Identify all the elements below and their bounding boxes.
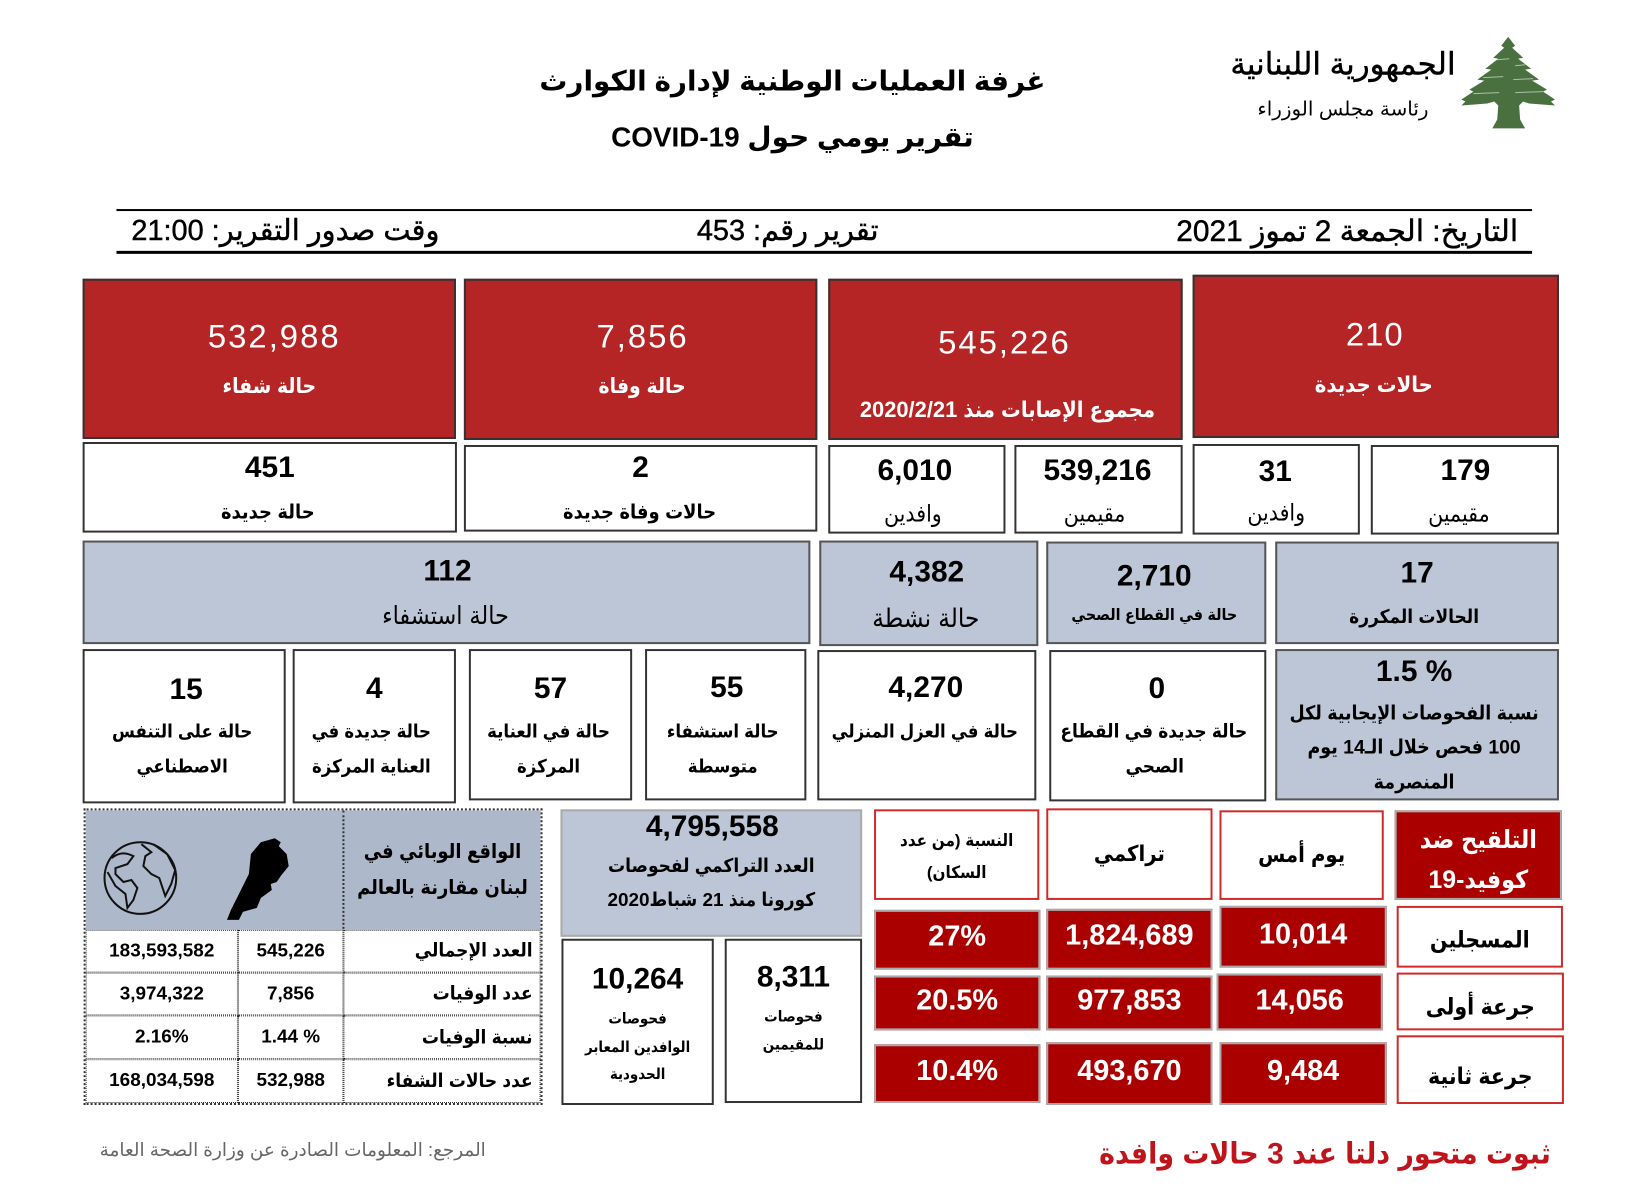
panel: active cases: حالة نشطة	[872, 603, 979, 633]
report time: وقت صدور التقرير: 21:00	[131, 215, 439, 247]
row: recoveries	[86, 1059, 540, 1103]
table header: الواقع الوبائي في	[364, 841, 521, 863]
panel: new arrivals: وافدين	[1247, 500, 1305, 526]
panel: new ICU: حالة جديدة في	[312, 721, 431, 742]
panel: health sector cases	[1046, 542, 1266, 644]
vaccine header: yesterday	[1219, 810, 1384, 900]
panel: total arrivals	[828, 445, 1005, 534]
vaccine: first dose cumulative: 977,853	[1077, 985, 1182, 1016]
vaccine label: registered: المسجلين	[1430, 927, 1530, 953]
panel: new deaths: حالات وفاة جديدة	[563, 502, 716, 524]
panel: hospitalised	[83, 541, 810, 644]
panel: positivity rate: المنصرمة	[1374, 772, 1455, 793]
panel: resident tests: فحوصات	[764, 1008, 823, 1025]
vaccine header: cumulative	[1046, 808, 1213, 900]
vaccine: second dose yesterday: 9,484	[1267, 1055, 1339, 1087]
panel: new health sector: حالة جديدة في القطاع	[1060, 722, 1247, 743]
panel: health sector cases: حالة في القطاع الصحي	[1071, 607, 1237, 624]
panel: positivity rate	[1275, 649, 1559, 800]
icon: Lebanon map	[227, 838, 289, 920]
vaccine: registered yesterday	[1219, 906, 1387, 968]
panel: deaths: حالة وفاة	[599, 375, 686, 398]
panel: moderate hospital	[645, 649, 806, 800]
title: غرفة العمليات الوطنية لإدارة الكوارث	[539, 66, 1045, 97]
row: death rate: 2.16%	[135, 1026, 189, 1047]
logo: Lebanese Republic calligraphy: الجمهورية اللبنانية	[1230, 47, 1456, 82]
panel: new arrivals	[1193, 444, 1360, 535]
vaccine: first dose cumulative	[1046, 976, 1213, 1030]
row: deaths: عدد الوفيات	[433, 984, 533, 1004]
panel: total cases: 545,226	[938, 324, 1071, 360]
row: death rate	[86, 1015, 540, 1060]
panel: arrival tests: فحوصات	[608, 1010, 667, 1027]
panel: active cases	[819, 541, 1038, 646]
panel: total arrivals: وافدين	[884, 501, 942, 527]
subtitle: تقرير يومي حول COVID-19	[611, 121, 974, 152]
vaccine: second dose yesterday	[1219, 1042, 1387, 1105]
panel: ICU: حالة في العناية	[487, 721, 610, 742]
vaccine: first dose yesterday: 14,056	[1255, 985, 1344, 1016]
panel: recoveries: حالة شفاء	[222, 375, 316, 398]
panel: new residents: مقيمين	[1428, 501, 1490, 527]
panel: new ICU: 4	[366, 672, 383, 705]
panel: new recoveries: 451	[245, 451, 295, 484]
panel: new cases	[1193, 275, 1559, 438]
panel: arrival tests: 10,264	[592, 963, 683, 996]
vaccine title	[1395, 810, 1562, 900]
row: deaths: 3,974,322	[120, 983, 204, 1004]
panel: moderate hospital: متوسطة	[688, 756, 758, 776]
panel: home isolation: حالة في العزل المنزلي	[832, 721, 1018, 742]
vaccine: first dose percent	[874, 976, 1040, 1030]
vaccine: first dose percent: 20.5%	[916, 985, 998, 1016]
panel: active cases: 4,382	[889, 555, 964, 588]
panel: ICU: المركزة	[517, 756, 580, 776]
vaccine label: registered	[1397, 906, 1563, 968]
logo: Lebanese Republic calligraphy	[1230, 47, 1456, 120]
panel: moderate hospital: 55	[710, 671, 743, 704]
row: deaths	[86, 972, 540, 1016]
panel: total arrivals: 6,010	[877, 454, 952, 487]
panel: cumulative tests: 4,795,558	[646, 810, 779, 843]
delta variant alert: ثبوت متحور دلتا عند 3 حالات وافدة	[1099, 1138, 1551, 1171]
panel: health sector cases: 2,710	[1117, 559, 1192, 592]
vaccine: registered cumulative	[1046, 909, 1213, 970]
panel: resident tests: 8,311	[757, 961, 830, 994]
source note: المرجع: المعلومات الصادرة عن وزارة الصحة العامة	[100, 1139, 486, 1160]
panel: deaths	[464, 279, 817, 440]
panel: new residents	[1371, 445, 1559, 535]
panel: new recoveries	[83, 442, 457, 533]
panel: positivity rate: 1.5 %	[1376, 655, 1452, 688]
panel: total cases: مجموع الإصابات منذ 2020/2/21	[860, 397, 1155, 422]
vaccine title: التلقيح ضد	[1420, 826, 1537, 854]
panel: total cases	[828, 279, 1183, 440]
vaccine header: yesterday: يوم أمس	[1258, 842, 1345, 867]
panel: new arrivals: 31	[1259, 455, 1292, 488]
panel: new ICU: العناية المركزة	[312, 756, 431, 776]
panel: positivity rate: 100 فحص خلال الـ14 يوم	[1307, 737, 1521, 759]
row: recoveries: عدد حالات الشفاء	[387, 1071, 533, 1092]
panel: moderate hospital: حالة استشفاء	[667, 721, 779, 742]
vaccine: second dose cumulative: 493,670	[1077, 1055, 1182, 1087]
panel: new health sector: 0	[1148, 672, 1165, 705]
vaccine label: first dose: جرعة أولى	[1426, 994, 1535, 1019]
panel: cumulative tests	[560, 809, 862, 937]
row: total: 183,593,582	[109, 940, 214, 961]
panel: new health sector	[1049, 650, 1266, 801]
panel: repeat cases: الحالات المكررة	[1349, 607, 1479, 628]
panel: arrival tests	[561, 939, 714, 1105]
panel: new deaths: 2	[632, 451, 649, 484]
vaccine header: cumulative: تراكمي	[1094, 841, 1165, 866]
vaccine header: percent of population: السكان)	[927, 863, 986, 882]
panel: home isolation	[817, 650, 1036, 800]
panel: resident tests	[725, 939, 862, 1103]
vaccine header: percent of population: النسبة (من عدد	[900, 831, 1013, 850]
panel: positivity rate: نسبة الفحوصات الإيجابية لكل	[1290, 703, 1539, 725]
icon: globe	[104, 841, 178, 915]
panel: ventilated: حالة على التنفس	[112, 721, 252, 742]
vaccine label: second dose: جرعة ثانية	[1428, 1063, 1533, 1089]
vaccine: second dose percent	[874, 1044, 1040, 1103]
panel: arrival tests: الوافدين المعابر	[585, 1039, 690, 1056]
panel: arrival tests: الحدودية	[610, 1066, 665, 1083]
panel: new deaths	[464, 445, 817, 532]
row: total: 545,226	[256, 940, 325, 961]
panel: recoveries	[83, 279, 456, 439]
vaccine label: first dose	[1397, 973, 1564, 1030]
vaccine: second dose percent: 10.4%	[916, 1055, 998, 1087]
panel: new residents: 179	[1440, 454, 1490, 487]
panel: cumulative tests: كورونا منذ 21 شباط2020	[607, 890, 815, 911]
row: death rate: نسبة الوفيات	[422, 1027, 533, 1048]
panel: hospitalised: حالة استشفاء	[382, 602, 509, 630]
panel: ICU	[469, 649, 632, 800]
panel: ICU: 57	[534, 672, 567, 705]
panel: ventilated: 15	[170, 673, 203, 706]
row: total	[86, 930, 540, 972]
vaccine: registered percent: 27%	[928, 921, 986, 953]
panel: ventilated: الاصطناعي	[137, 756, 228, 776]
vaccine label: second dose	[1397, 1035, 1564, 1104]
vaccine header: percent of population	[874, 809, 1039, 900]
panel: total residents: مقيمين	[1064, 501, 1125, 527]
panel: home isolation: 4,270	[888, 671, 963, 704]
panel: total residents: 539,216	[1044, 454, 1152, 487]
icon: cedar tree	[1462, 36, 1555, 128]
panel: new ICU	[293, 649, 456, 803]
panel: new health sector: الصحي	[1126, 757, 1184, 777]
panel: hospitalised: 112	[423, 554, 472, 587]
panel: deaths: 7,856	[597, 318, 689, 354]
row: total: العدد الإجمالي	[415, 941, 533, 962]
panel: repeat cases	[1275, 542, 1559, 644]
panel: repeat cases: 17	[1400, 556, 1434, 589]
vaccine: registered percent	[874, 910, 1040, 970]
row: death rate: 1.44 %	[261, 1026, 320, 1047]
vaccine: registered yesterday: 10,014	[1259, 919, 1347, 951]
panel: new cases: حالات جديدة	[1315, 372, 1433, 397]
vaccine: second dose cumulative	[1046, 1042, 1213, 1105]
panel: new cases: 210	[1346, 316, 1404, 352]
vaccine: registered cumulative: 1,824,689	[1065, 920, 1194, 952]
table: Lebanon compared with the world	[84, 808, 543, 1105]
panel: resident tests: للمقيمين	[763, 1036, 824, 1053]
logo: Lebanese Republic calligraphy: رئاسة مجلس الوزراء	[1257, 99, 1428, 120]
row: deaths: 7,856	[267, 983, 314, 1004]
table header	[86, 810, 541, 933]
report number: تقرير رقم: 453	[697, 215, 879, 247]
panel: new recoveries: حالة جديدة	[221, 502, 315, 524]
table header: لبنان مقارنة بالعالم	[357, 877, 528, 899]
panel: total residents	[1014, 445, 1183, 534]
row: recoveries: 168,034,598	[109, 1070, 214, 1091]
panel: recoveries: 532,988	[208, 318, 341, 354]
vaccine title: كوفيد-19	[1428, 866, 1528, 894]
panel: cumulative tests: العدد التراكمي لفحوصات	[608, 856, 815, 877]
row: recoveries: 532,988	[256, 1070, 325, 1091]
vaccine: first dose yesterday	[1217, 974, 1383, 1030]
report date: التاريخ: الجمعة 2 تموز 2021	[1176, 215, 1518, 248]
panel: ventilated	[83, 649, 286, 803]
